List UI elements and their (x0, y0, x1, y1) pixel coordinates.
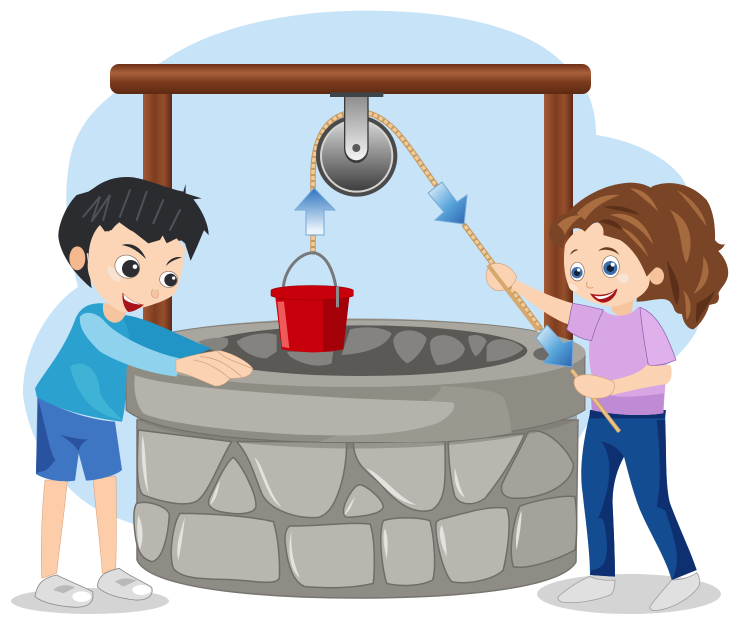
girl hair highlights (557, 188, 658, 257)
arrow down upper (428, 182, 467, 224)
rim side (126, 353, 585, 443)
boy neck (103, 303, 127, 323)
girl jeans (581, 413, 697, 580)
girl torso (589, 307, 667, 415)
boy hair fringe (87, 187, 209, 261)
well stones (134, 430, 577, 588)
girl jeans shadow (589, 410, 697, 580)
girl nose (587, 282, 593, 288)
arrow up (295, 188, 335, 235)
boy face (88, 222, 185, 313)
boy (35, 177, 253, 607)
boy eyes (111, 251, 144, 282)
girl arm left (512, 278, 573, 325)
pulley (316, 92, 397, 197)
boy hair highlights (83, 190, 180, 230)
boy front arm (80, 313, 180, 377)
boy shorts (36, 397, 122, 481)
girl brows (570, 247, 619, 255)
boy hands (176, 351, 253, 386)
boy brows (122, 244, 182, 266)
girl rope lower (572, 370, 619, 432)
girl lower arm (607, 365, 672, 395)
well base (137, 420, 578, 598)
girl hair top (549, 183, 669, 277)
girl face (564, 223, 650, 307)
boy torso (35, 303, 130, 422)
well side hole (533, 347, 559, 361)
girl upper hand (486, 263, 517, 291)
boy shoes (35, 575, 93, 607)
boy ear (69, 246, 85, 270)
boy hair back (58, 177, 209, 288)
rim front highlight (134, 375, 454, 435)
well inner stones (198, 327, 523, 366)
boy mouth (122, 293, 144, 312)
bucket (271, 253, 353, 352)
stone highlights (137, 435, 522, 578)
girl cheeks (568, 274, 629, 291)
well inner hole (197, 325, 527, 376)
girl eyes (570, 262, 584, 281)
wooden frame (110, 64, 591, 340)
girl lower hand (574, 375, 615, 398)
boy legs (41, 476, 116, 578)
boy nose (151, 289, 158, 298)
rim top surface (124, 318, 586, 387)
girl (486, 183, 728, 611)
girl mouth (590, 288, 617, 303)
well shadow under rim (137, 405, 577, 448)
girl ear (649, 267, 664, 285)
well (124, 318, 586, 598)
girl sleeves (567, 303, 603, 341)
rope upper (313, 113, 540, 328)
girl ponytail (637, 183, 728, 329)
well rim (124, 318, 586, 443)
girl neck (612, 300, 633, 316)
girl shoes (558, 573, 700, 611)
arrow down lower (536, 325, 573, 367)
rope over hand (488, 265, 538, 330)
boy back arm (123, 315, 212, 363)
ground shadows (11, 574, 721, 614)
